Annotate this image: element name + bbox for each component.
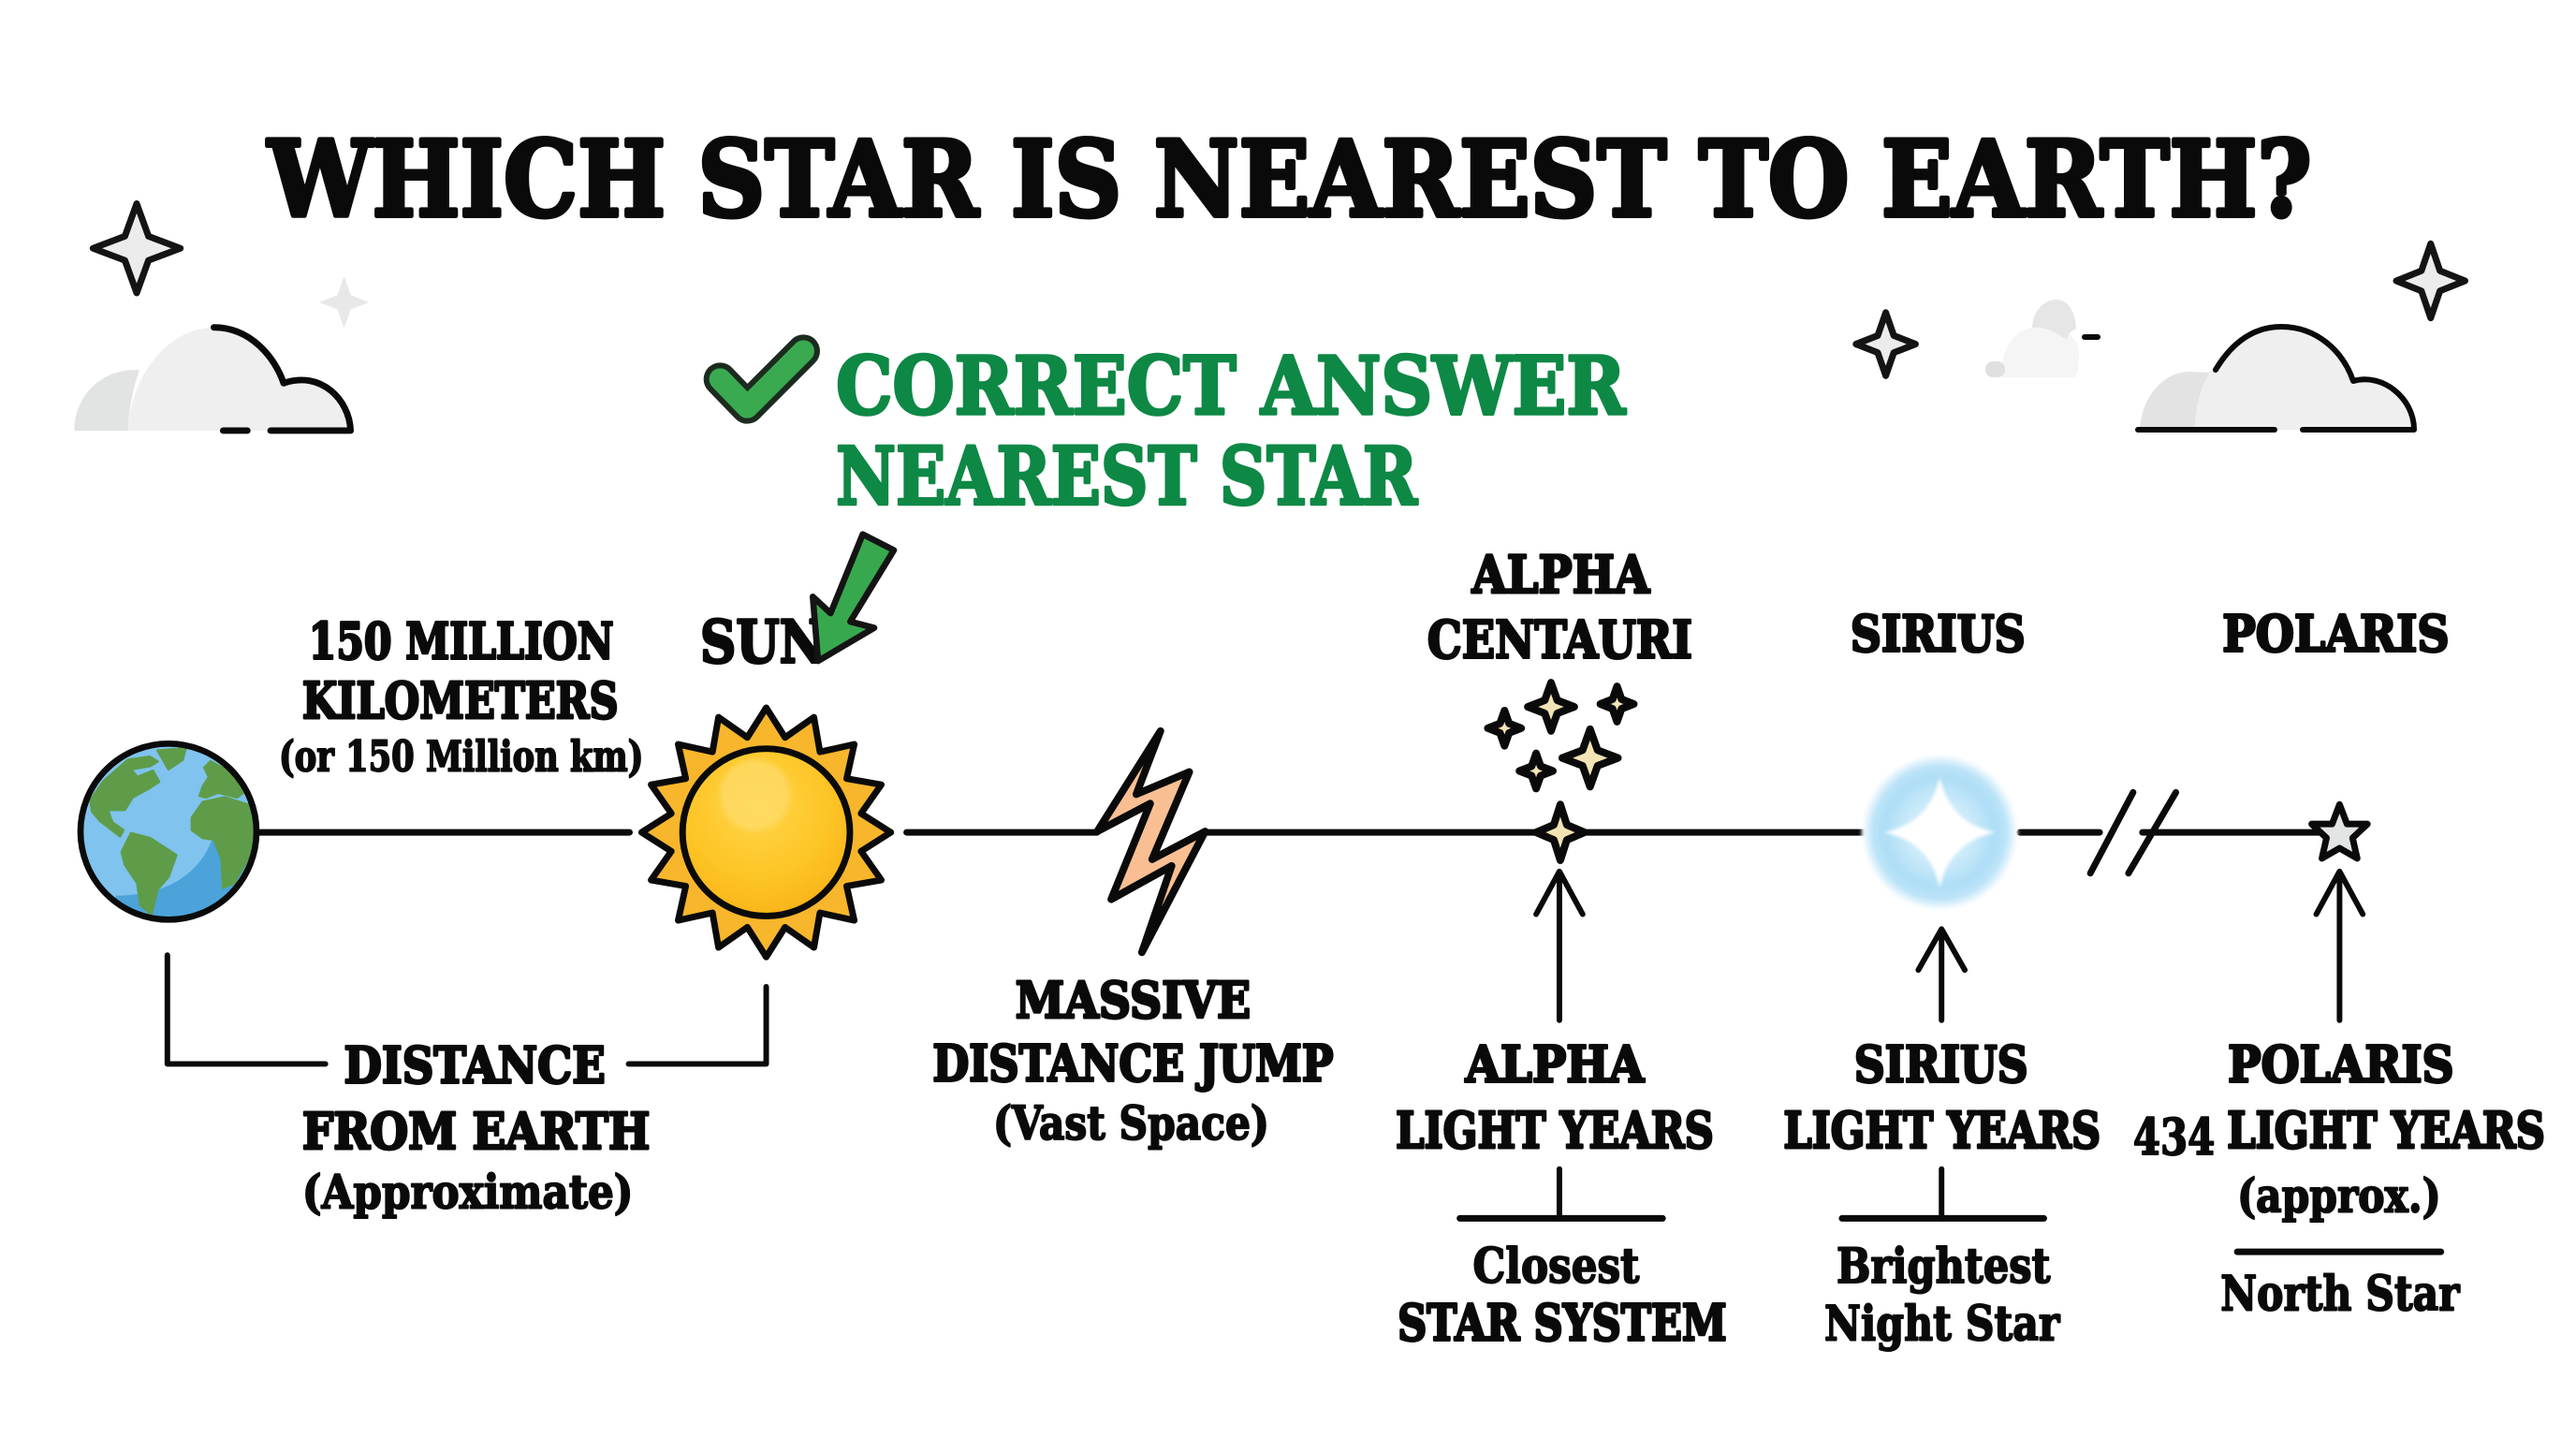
icon: left cloud (74, 328, 351, 431)
icon: alpha centauri star on timeline (1536, 804, 1585, 860)
label: massive distance jump: DISTANCE JUMP (932, 1034, 1334, 1093)
timeline (259, 829, 2320, 836)
icon: polaris star (2312, 804, 2367, 858)
note: closest star system: Closest (1473, 1239, 1639, 1295)
label: alpha light years: LIGHT YEARS (1396, 1101, 1714, 1160)
note: brightest night star: Night Star (1824, 1296, 2060, 1352)
icon: faint star left (319, 276, 369, 329)
label: sirius light years: SIRIUS (1854, 1034, 2028, 1093)
label: alpha light years: ALPHA (1465, 1034, 1646, 1093)
icon: small star right (1856, 313, 1915, 375)
label: alpha centauri: ALPHA (1471, 545, 1650, 606)
icon: right cloud (2138, 327, 2414, 430)
note: brightest night star (1824, 1239, 2060, 1352)
label: massive distance jump: (Vast Space) (993, 1095, 1269, 1151)
label: distance from earth (302, 1035, 650, 1219)
label: polaris light years: 434 (2133, 1108, 2215, 1167)
label: massive distance jump: MASSIVE (1016, 971, 1251, 1030)
label: alpha centauri (1427, 545, 1692, 670)
note: closest star system: STAR SYSTEM (1398, 1293, 1727, 1352)
label: polaris light years: (approx.) (2237, 1167, 2441, 1223)
arrow: polaris (2317, 872, 2363, 1020)
icon: green check mark (720, 351, 803, 407)
note: closest star system (1398, 1239, 1727, 1352)
label: sirius light years (1783, 1034, 2100, 1160)
label: distance to sun: KILOMETERS (302, 671, 619, 730)
label: sun: SUN (700, 607, 825, 676)
arrow: alpha centauri (1536, 872, 1583, 1020)
label: massive distance jump (932, 971, 1334, 1151)
icon: sirius glowing star (1862, 755, 2018, 911)
icon: lightning bolt distance jump (1097, 731, 1205, 952)
note: brightest night star: Brightest (1837, 1239, 2051, 1295)
label: distance from earth: FROM EARTH (302, 1102, 650, 1161)
label: distance to sun: (or 150 Million km) (279, 732, 643, 782)
arrow: sirius (1918, 929, 1965, 1020)
callout: correct answer (836, 340, 1626, 523)
label: sirius light years: LIGHT YEARS (1783, 1101, 2100, 1160)
icon: sparkle star top left (93, 204, 181, 293)
icon: alpha centauri star cluster (1487, 682, 1633, 788)
icon: faint small cloud (1985, 300, 2098, 377)
icon: earth (80, 743, 262, 930)
callout: correct answer: CORRECT ANSWER (836, 340, 1626, 433)
callout: correct answer: NEAREST STAR (836, 430, 1418, 523)
bracket: distance from earth (168, 955, 767, 1064)
label: alpha centauri: CENTAURI (1427, 609, 1692, 670)
divider: polaris note (2237, 1249, 2441, 1255)
note: north star: North Star (2220, 1267, 2460, 1323)
icon: break slashes (2090, 792, 2176, 873)
label: polaris: POLARIS (2222, 604, 2450, 663)
connector: sirius note (1842, 1169, 2043, 1218)
label: sirius: SIRIUS (1851, 604, 2026, 663)
label: polaris light years: POLARIS (2228, 1034, 2454, 1093)
label: polaris light years (2133, 1034, 2545, 1223)
label: distance to sun (279, 611, 643, 782)
icon: sun (641, 708, 891, 957)
title: WHICH STAR IS NEAREST TO EARTH? (267, 119, 2312, 241)
label: distance to sun: 150 MILLION (309, 611, 614, 670)
icon: sparkle star top right (2396, 243, 2466, 318)
label: alpha light years (1396, 1034, 1714, 1160)
label: distance from earth: DISTANCE (344, 1035, 606, 1094)
label: distance from earth: (Approximate) (302, 1164, 634, 1219)
arrow: green pointer to sun (812, 535, 894, 661)
connector: alpha note (1460, 1169, 1662, 1218)
